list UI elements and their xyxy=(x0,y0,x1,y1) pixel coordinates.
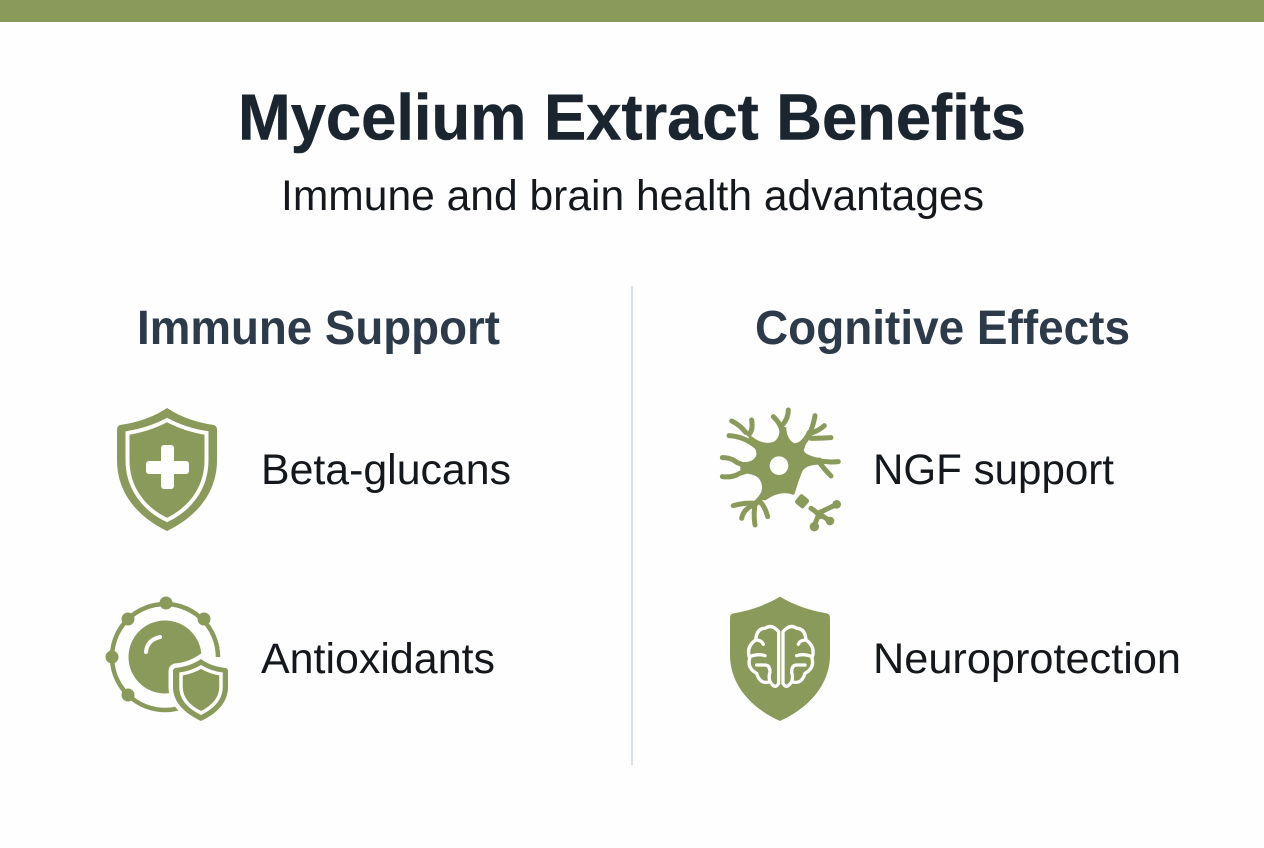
icon: antioxidant sphere with shield xyxy=(106,596,228,721)
icon: shield with cross xyxy=(117,408,217,531)
icon: shield with brain xyxy=(730,597,830,721)
heading: cognitive effects: Cognitive Effects xyxy=(755,302,1130,355)
label: antioxidants: Antioxidants xyxy=(261,635,495,683)
panel: cognitive effects xyxy=(722,302,1181,721)
subtitle: Immune and brain health advantages xyxy=(281,172,984,220)
top accent bar xyxy=(0,0,1264,22)
label: ngf support: NGF support xyxy=(873,446,1114,494)
panel: immune support xyxy=(106,302,511,721)
center divider xyxy=(631,286,633,765)
icon: neuron xyxy=(722,410,841,531)
label: beta-glucans: Beta-glucans xyxy=(261,446,511,494)
title: Mycelium Extract Benefits xyxy=(238,80,1026,154)
heading: immune support: Immune Support xyxy=(137,302,500,355)
label: neuroprotection: Neuroprotection xyxy=(873,635,1181,683)
